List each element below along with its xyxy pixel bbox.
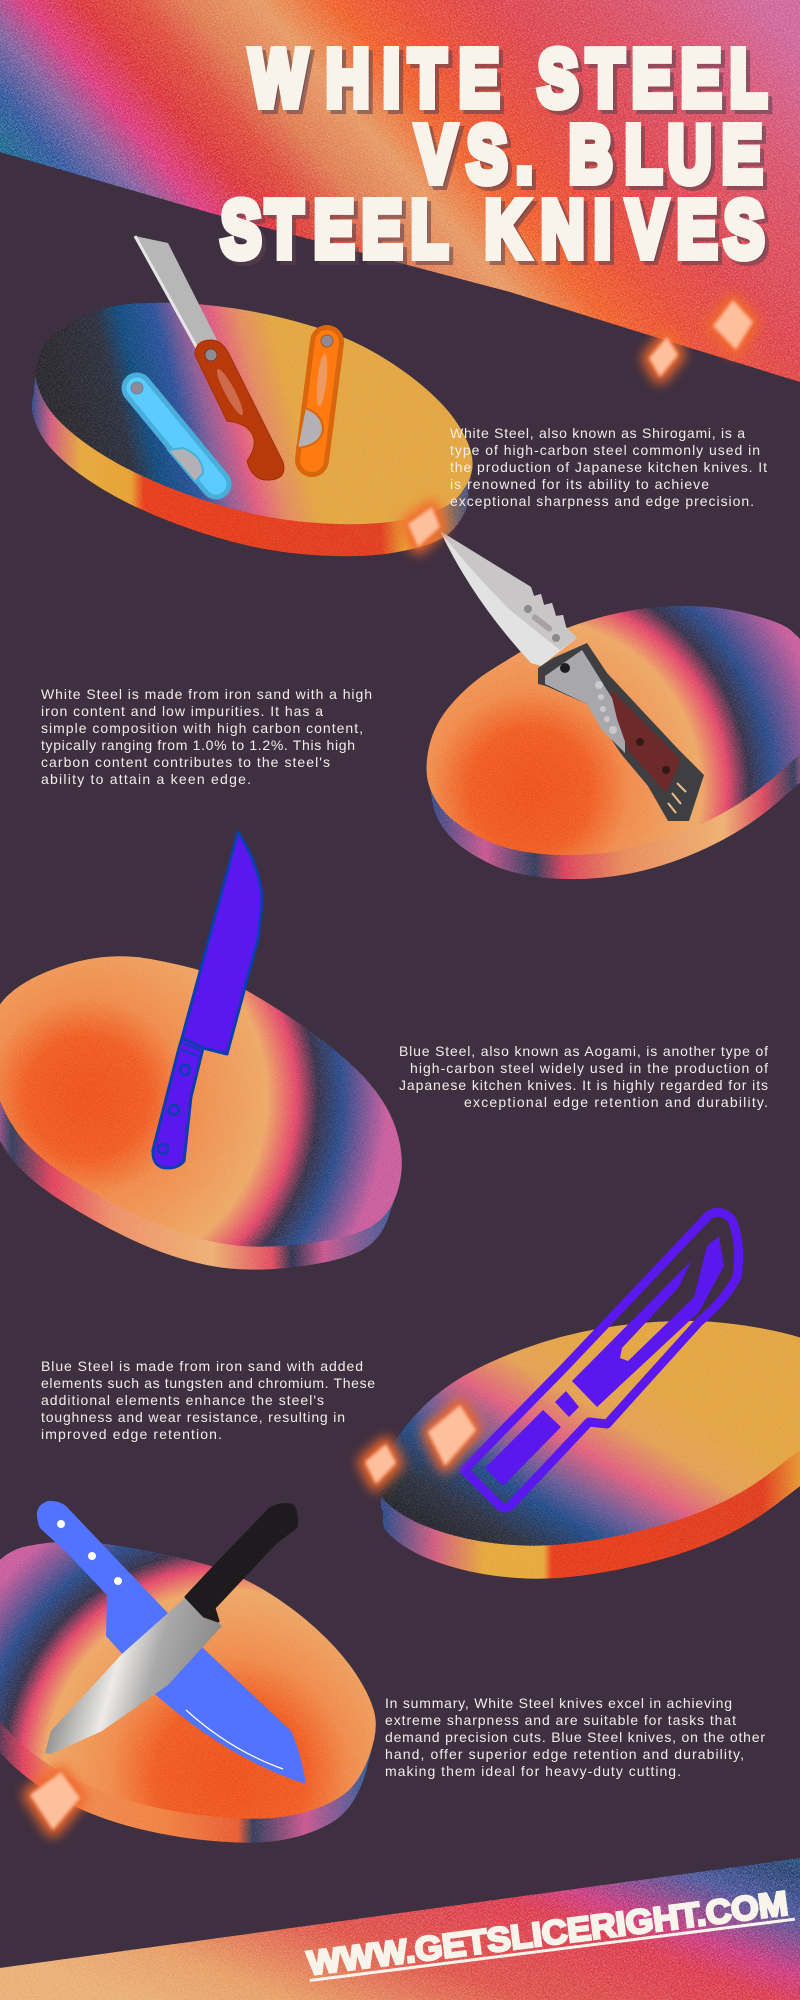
- text block: summary: making them ideal for heavy-duty cutting.: [385, 1763, 681, 1779]
- icon: silver chef knife: [45, 1505, 297, 1754]
- title: WHITE STEEL: [254, 37, 771, 126]
- text block: white steel composition: ability to attain a keen edge.: [41, 771, 251, 787]
- sparkle: [30, 1772, 80, 1830]
- text block: white steel intro: the production of Japanese kitchen knives. It: [450, 459, 767, 475]
- icon: grey serrated folding knife: [440, 531, 704, 821]
- title: STEEL KNIVES: [225, 188, 768, 277]
- header gradient wedge: [0, 0, 800, 382]
- text block: white steel intro: White Steel, also known as Shirogami, is a: [450, 425, 745, 441]
- icon: purple chef knife: [153, 832, 262, 1168]
- icon: light blue utility knife: [131, 382, 216, 484]
- disc: yellow plate right: [379, 1321, 800, 1579]
- text block: summary: [385, 1695, 765, 1779]
- icon: purple outlined knife: [464, 1212, 739, 1508]
- text block: blue steel intro: Japanese kitchen knives. It is highly regarded for its: [399, 1077, 768, 1093]
- title: STEEL KNIVES: [221, 184, 764, 273]
- text block: blue steel intro: Blue Steel, also known as Aogami, is another type of: [399, 1043, 768, 1059]
- text block: blue steel composition: Blue Steel is made from iron sand with added: [41, 1358, 363, 1374]
- text block: white steel composition: White Steel is made from iron sand with a high: [41, 686, 372, 702]
- website url: WWW.GETSLICERIGHT.COM: [305, 1885, 790, 1983]
- disc: orange plate right: [426, 606, 800, 879]
- footer gradient wedge: [0, 1858, 800, 2000]
- title: VS. BLUE: [416, 109, 762, 198]
- text block: summary: hand, offer superior edge retention and durability,: [385, 1746, 744, 1762]
- text block: white steel intro: exceptional sharpness and edge precision.: [450, 493, 754, 509]
- title: [221, 33, 771, 277]
- title: WHITE STEEL: [250, 33, 767, 122]
- text block: blue steel intro: exceptional edge retention and durability.: [464, 1094, 768, 1110]
- text block: summary: demand precision cuts. Blue Steel knives, on the other: [385, 1729, 765, 1745]
- sparkle: [428, 1405, 476, 1466]
- sparkle: [408, 507, 440, 547]
- text block: blue steel composition: toughness and wear resistance, resulting in: [41, 1409, 345, 1425]
- title: VS. BLUE: [420, 113, 766, 202]
- disc: orange plate bottom left: [0, 1541, 376, 1843]
- disc: orange plate left: [0, 956, 402, 1270]
- text block: summary: In summary, White Steel knives excel in achieving: [385, 1695, 732, 1711]
- text block: blue steel composition: improved edge retention.: [41, 1426, 222, 1442]
- disc: yellow plate with folding knives: [32, 303, 473, 556]
- icon: brown utility knife: [135, 236, 284, 480]
- text block: white steel composition: iron content and low impurities. It has a: [41, 703, 323, 719]
- text block: blue steel intro: [399, 1043, 768, 1110]
- sparkle: [713, 300, 753, 350]
- text block: blue steel composition: [41, 1358, 375, 1442]
- text block: white steel composition: simple composition with high carbon content,: [41, 720, 363, 736]
- text block: white steel intro: is renowned for its ability to achieve: [450, 476, 709, 492]
- text block: blue steel composition: additional elements enhance the steel's: [41, 1392, 324, 1408]
- text block: summary: extreme sharpness and are suitable for tasks that: [385, 1712, 736, 1728]
- text block: blue steel intro: high-carbon steel widely used in the production of: [410, 1060, 768, 1076]
- icon: orange utility knife: [297, 335, 333, 460]
- text block: white steel intro: type of high-carbon steel commonly used in: [450, 442, 760, 458]
- sparkle: [649, 337, 678, 377]
- text block: white steel intro: [450, 425, 767, 509]
- icon: blue chef knife: [37, 1501, 306, 1784]
- text block: white steel composition: [41, 686, 372, 787]
- text block: blue steel composition: elements such as tungsten and chromium. These: [41, 1375, 375, 1391]
- text block: white steel composition: carbon content contributes to the steel's: [41, 754, 330, 770]
- text block: white steel composition: typically ranging from 1.0% to 1.2%. This high: [41, 737, 355, 753]
- sparkle: [365, 1444, 396, 1484]
